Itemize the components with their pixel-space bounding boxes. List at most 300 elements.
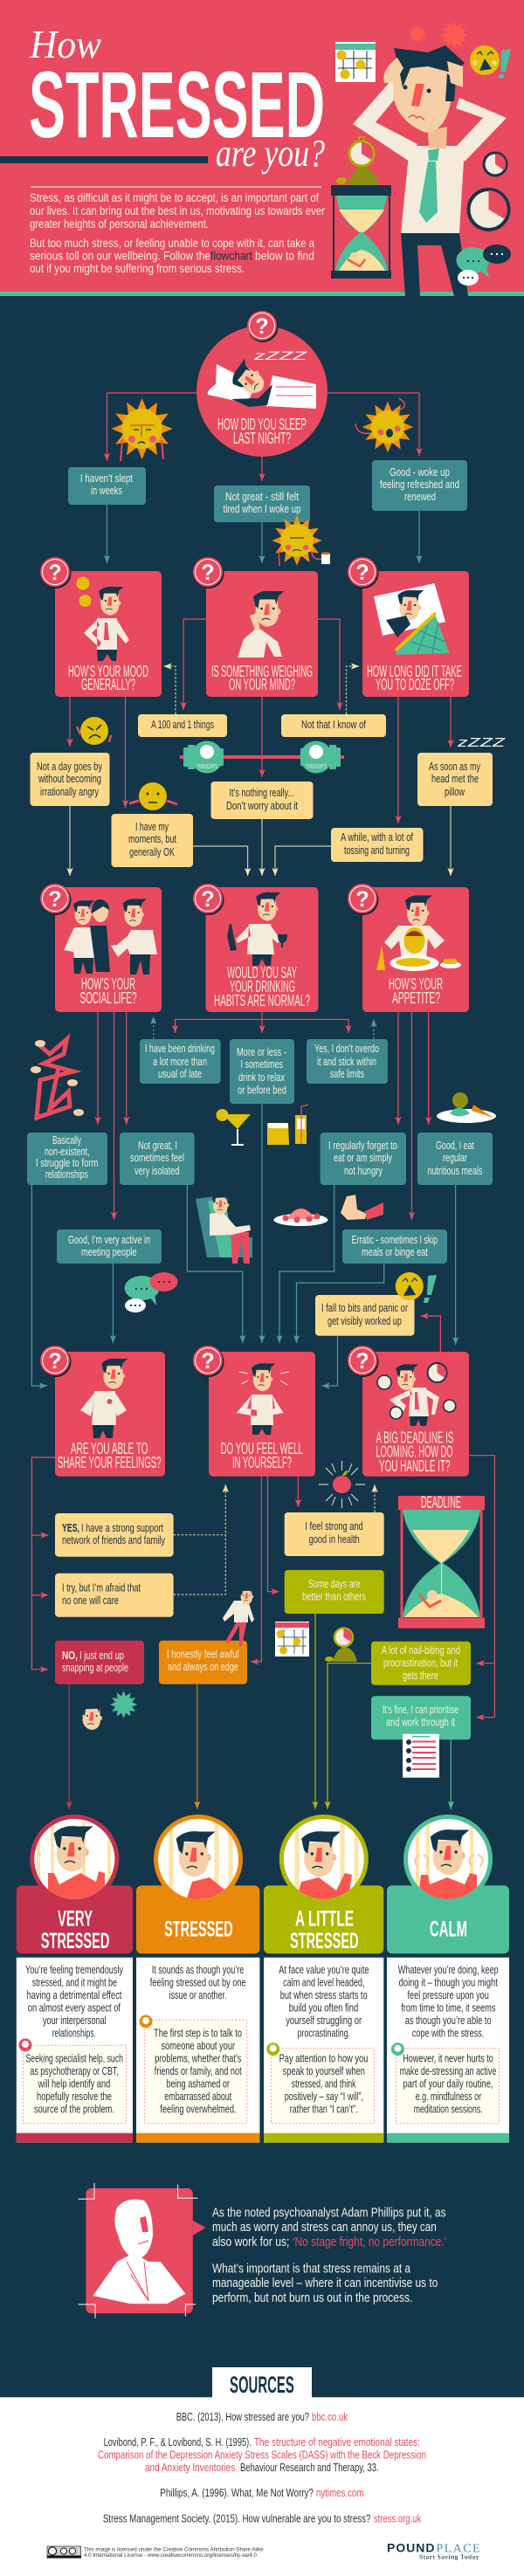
question badge: ? (48, 887, 62, 912)
result card: very stressed (17, 1815, 133, 2143)
answer: fall to bits: get visibly worked up (328, 1314, 402, 1327)
answer: 100 and 1 things: A 100 and 1 things (151, 718, 214, 731)
icon: man in armchair (196, 1192, 252, 1264)
description (150, 1963, 246, 2001)
icon: checklist (403, 1734, 439, 1778)
answer: not a day (30, 753, 110, 806)
panel: share feelings (55, 1352, 165, 1477)
portrait (403, 1815, 493, 1904)
source list: Lovibond, P. F., & Lovibond, S. H. (1995). (104, 2436, 252, 2449)
quote text (212, 2206, 446, 2305)
panel: deadline (362, 1352, 469, 1477)
result card: stressed (136, 1815, 259, 2143)
description: cope with the stress. (412, 2026, 484, 2039)
heading (217, 416, 307, 447)
answer: not that I know of (281, 714, 386, 737)
heading: HOW DID YOU SLEEP (217, 416, 307, 433)
heading: LAST NIGHT? (233, 430, 291, 447)
heading: SOURCES (230, 2372, 294, 2398)
answer: more or less: More or less - (237, 1045, 286, 1058)
answer: very isolated: sometimes feel (130, 1151, 184, 1164)
answer: drinking more: I have been drinking (145, 1042, 215, 1055)
figure: proud man (237, 1363, 289, 1435)
heading (290, 1907, 359, 1953)
question badge: ? (48, 1349, 62, 1374)
heading (68, 663, 148, 693)
result card: calm (387, 1815, 509, 2143)
tip box (140, 2015, 247, 2124)
tip box: stressed, and think (292, 2077, 356, 2090)
tip box: rather than “I can’t”. (290, 2102, 358, 2115)
intro text: serious toll on our wellbeing. Follow the (30, 250, 210, 262)
icon: happy sun (355, 398, 413, 452)
title (0, 22, 325, 175)
tip box: friends or family, and not (155, 2064, 242, 2077)
answer: forget to eat (321, 1133, 406, 1185)
tip box: meditation sessions. (414, 2102, 483, 2115)
icon: panic emoji (396, 1272, 437, 1303)
description: but when stress starts to (280, 1988, 368, 2001)
answer: fine: and work through it (386, 1716, 455, 1729)
intro text: our lives. It can bring out the best in us, motivating us towards ever (30, 204, 325, 217)
icon: tangled arms (31, 1039, 84, 1118)
answer: my moments: I have my (135, 820, 169, 833)
source list: Behaviour Research and Therapy, 33. (240, 2462, 379, 2474)
question badge: ? (201, 561, 215, 585)
icon: thoughts dumbbell: THOUGHTS (196, 764, 217, 770)
description (25, 1963, 123, 2039)
answer: no: snapping at people (62, 1661, 128, 1674)
intro text: out if you might be suffering from serious stress. (30, 262, 245, 275)
icon: speech bubbles (456, 245, 511, 286)
answer: safe limits: safe limits (330, 1067, 364, 1080)
answer: no (55, 1641, 144, 1684)
result card: a little stressed (264, 1815, 383, 2143)
answer: my moments: generally OK (129, 845, 175, 858)
answer: nail-biting (371, 1642, 471, 1685)
answer: fall to bits: I fall to bits and panic or (321, 1301, 408, 1314)
icon: apple (319, 1461, 365, 1508)
quote text: much as worry and stress can annoy us, they can (212, 2221, 437, 2235)
heading: SOCIAL LIFE? (80, 989, 136, 1007)
connectors: row two (31, 1012, 456, 1386)
answer: yes support: YES, (62, 1521, 79, 1534)
answer: as soon as: As soon as my (429, 760, 480, 773)
answer: drinking more: usual of late (158, 1067, 202, 1080)
answer: fine (371, 1696, 471, 1739)
question badge (193, 557, 224, 589)
answer: not a day: irrationally angry (40, 785, 99, 798)
answer: haven't slept (68, 467, 146, 505)
source list: Comparison of the Depression Anxiety Stress Scales (DASS) with the Beck Depression (98, 2449, 426, 2462)
illustration: stressed man (353, 45, 507, 296)
logo: PoundPlace (387, 2541, 480, 2561)
answer: forget to eat: eat or am simply (334, 1151, 392, 1164)
description (279, 1963, 369, 2039)
description: stressed, and it might be (32, 1975, 117, 1988)
portrait (30, 1815, 119, 1904)
title: are you? (216, 132, 325, 175)
description: You’re feeling tremendously (25, 1963, 123, 1976)
heading: HABITS ARE NORMAL? (214, 992, 310, 1009)
answer: awful: I honestly feel awful (167, 1648, 239, 1661)
answer: fall to bits (315, 1295, 414, 1336)
source list: BBC. (2013). How stressed are you? (176, 2411, 309, 2423)
tip box: someone about your (161, 2039, 236, 2052)
answer: erratic: meals or binge eat (362, 1245, 428, 1258)
answer: yes support (55, 1513, 174, 1557)
answer: not great (214, 486, 310, 522)
answer: good (372, 460, 467, 511)
intro text: But too much stress, or feeling unable to cope with it, can take a (30, 237, 314, 250)
header band (0, 0, 524, 296)
answer: a while (331, 828, 423, 862)
question badge: ? (201, 1349, 215, 1374)
icon: burst stars (409, 21, 468, 49)
quote text: What’s important is that stress remains at a (212, 2262, 411, 2276)
title: STRESSED (29, 52, 325, 157)
tip box: speak to yourself when (283, 2064, 365, 2077)
intro text: Stress, as difficult as it might be to accept, is an important part of (30, 191, 319, 204)
tip box (266, 2042, 375, 2124)
description: relationships. (52, 2026, 96, 2039)
heading: YOUR DRINKING (230, 978, 295, 995)
answer: good meals: regular (443, 1151, 467, 1164)
source list: Phillips, A. (1996). What, Me Not Worry? (160, 2487, 314, 2499)
answer: strong (285, 1512, 384, 1556)
intro text: below to find (255, 250, 314, 262)
intro text (30, 186, 325, 275)
heading (41, 1907, 110, 1953)
connectors: row one (70, 619, 451, 876)
licence badge (47, 2546, 81, 2559)
licence text: This image is licensed under the Creative Commons Attribution-Share Alike (84, 2547, 264, 2553)
question badge (348, 884, 379, 915)
answer: my moments (112, 814, 193, 867)
answer: a while: A while, with a lot of (341, 830, 413, 844)
source list: nytimes.com (316, 2487, 363, 2499)
answer: active socially: Good, I’m very active in (68, 1233, 150, 1246)
answer: forget to eat: not hungry (344, 1164, 383, 1177)
description: as though you’re able to (405, 2014, 492, 2027)
panel: Adam Phillips portrait (79, 2183, 205, 2318)
tip box: positively – say “I will”, (285, 2090, 363, 2103)
answer: some days: better than others (302, 1590, 366, 1603)
answer: basically non-existent: I struggle to form (36, 1156, 98, 1169)
tip box: embarrassed about (164, 2090, 231, 2103)
answer: awful: and always on edge (168, 1660, 238, 1673)
figure: group of people (64, 899, 157, 975)
question badge (40, 557, 72, 589)
licence text: 4.0 International License - www.creativecommons.org/licenses/by-sa/4.0 (84, 2552, 257, 2559)
icon: deadline hourglass (398, 1494, 485, 1629)
answer: safe limits (307, 1039, 388, 1084)
panel: drinking (206, 887, 318, 1012)
heading: STRESSED (164, 1918, 233, 1942)
portrait (154, 1815, 243, 1904)
tip box: Pay attention to how you (279, 2051, 368, 2064)
title: How (29, 22, 101, 66)
licence text (84, 2547, 264, 2559)
icon: thoughts dumbbell (180, 740, 344, 774)
answer: good: feeling refreshed and (380, 478, 459, 491)
question badge: ? (355, 887, 369, 912)
answer: haven't slept: in weeks (91, 484, 122, 497)
icon: sleepy sun with mug (272, 515, 330, 566)
description: your interpersonal (43, 2014, 107, 2027)
icon: angry emoji (77, 717, 111, 745)
answer: not great: tired when I woke up (224, 502, 300, 515)
heading: APPETITE? (392, 989, 440, 1007)
question badge: ? (255, 314, 269, 339)
answer: not great: Not great - still felt (225, 490, 299, 503)
answer: very isolated (120, 1133, 195, 1185)
icon: hourglass (331, 185, 391, 279)
figure: worried man (238, 591, 284, 658)
answer: drinking more (140, 1039, 221, 1084)
source list: stress.org.uk (374, 2512, 422, 2524)
quote text: perform, but not burn us out in the process. (212, 2291, 412, 2305)
tip box: being ashamed or (167, 2077, 230, 2090)
heading: STRESSED (290, 1929, 359, 1953)
connectors: row three (31, 1456, 494, 1809)
heading: YOU HANDLE IT? (379, 1457, 451, 1475)
description (398, 1963, 499, 2039)
answer: drinking more: a lot more than (153, 1055, 207, 1068)
heading: LOOMING. HOW DO (376, 1443, 452, 1461)
quote text: As the noted psychoanalyst Adam Phillips put it, as (212, 2206, 445, 2220)
description: build you often find (289, 2001, 358, 2014)
answer: haven't slept: I haven’t slept (80, 472, 133, 485)
answer: basically non-existent: relationships (45, 1167, 88, 1181)
figure: man eating (376, 895, 461, 971)
answer: not a day: without becoming (38, 772, 101, 785)
icon: turtle with stopwatch (325, 1628, 357, 1662)
answer: 100 and 1 things (138, 714, 227, 737)
heading: A BIG DEADLINE IS (376, 1429, 453, 1447)
question badge (193, 1346, 224, 1377)
description: feeling stressed out by one (150, 1975, 246, 1988)
panel: doze off (362, 571, 469, 697)
icon: man in bed: zZZZ (252, 348, 307, 362)
source list: and Anxiety Inventories. (145, 2462, 238, 2474)
answer: as soon as: pillow (445, 785, 465, 798)
answer: good: renewed (404, 490, 436, 503)
answer: nothing really: It’s nothing really... (229, 786, 294, 799)
heading (80, 975, 136, 1007)
answer: nail-biting: gets there (403, 1669, 438, 1682)
description: It sounds as though you’re (152, 1963, 244, 1976)
answer: I try (55, 1574, 174, 1617)
heading: VERY (58, 1907, 93, 1932)
tip box (391, 2042, 500, 2124)
answer: strong: I feel strong and (305, 1519, 363, 1533)
answer: safe limits: it and stick within (317, 1055, 376, 1068)
icon: stopwatch on turtle (336, 137, 379, 185)
panel: social life (55, 887, 162, 1012)
answer: yes support: I have a strong support (81, 1521, 163, 1534)
quote text: also work for us; (212, 2235, 289, 2249)
answer: more or less: or before bed (238, 1084, 286, 1097)
panel: appetite (362, 887, 469, 1012)
icon: walking man (223, 1587, 255, 1646)
source list: bbc.co.uk (312, 2411, 348, 2423)
icon: sleep letters: zZZZ (456, 735, 506, 750)
description: yourself struggling or (286, 2014, 362, 2027)
answer: awful (159, 1641, 247, 1684)
figure: man on pillow (374, 583, 450, 655)
answer: I try: no one will care (62, 1594, 119, 1607)
heading: HOW’S YOUR (389, 975, 443, 993)
icon: waving hand (341, 1195, 383, 1220)
heading: WOULD YOU SAY (227, 964, 297, 981)
portrait (279, 1815, 369, 1904)
heading: GENERALLY? (81, 676, 135, 693)
answer: good: Good - woke up (390, 465, 450, 479)
question badge (40, 884, 72, 915)
answer: yes support: network of friends and family (62, 1533, 165, 1546)
description: feel pressure upon you (407, 1988, 489, 2001)
heading: YOU TO DOZE OFF? (376, 676, 454, 693)
heading: IS SOMETHING WEIGHING (211, 663, 313, 680)
logo: PoundPlace: Start Saving Today (419, 2553, 479, 2561)
answer: very isolated: Not great, I (138, 1139, 177, 1152)
description: on almost every aspect of (28, 2001, 121, 2014)
icon: calendar (335, 42, 376, 82)
answer: good meals: Good, I eat (436, 1139, 474, 1152)
icon: chat bubbles (125, 1272, 178, 1312)
panel: feel well (209, 1352, 315, 1477)
heading: HOW’S YOUR MOOD (68, 663, 148, 680)
answer: more or less: I sometimes (241, 1057, 283, 1071)
question badge: ? (355, 561, 369, 585)
sources section (0, 2367, 524, 2576)
answer: very isolated: very isolated (134, 1164, 180, 1177)
figure: man with two moods (77, 576, 129, 661)
answer: a while: tossing and turning (344, 844, 410, 857)
heading: SHARE YOUR FEELINGS? (58, 1454, 161, 1471)
answer: some days: Some days are (308, 1577, 360, 1590)
logo: PoundPlace: POUND (387, 2541, 435, 2555)
description: At face value you’re quite (279, 1963, 369, 1976)
answer: nothing really (211, 782, 313, 819)
question badge (193, 884, 224, 915)
figure: man with watches (377, 1363, 456, 1426)
answer: as soon as (417, 753, 493, 806)
heading (376, 1429, 453, 1475)
connectors: sleep question (107, 393, 419, 563)
intro text: flowchart (210, 250, 252, 262)
question badge (40, 1346, 72, 1377)
answer: erratic: Erratic - sometimes I skip (352, 1233, 438, 1246)
answer: safe limits: Yes, I don’t overdo (314, 1042, 379, 1055)
answer: I try: I try, but I’m afraid that (62, 1581, 141, 1595)
tip box: feeling overwhelmed. (160, 2102, 237, 2115)
heading: STRESSED (41, 1929, 110, 1953)
heading: ARE YOU ABLE TO (71, 1440, 148, 1457)
description: having a detrimental effect (27, 1988, 122, 2001)
icon: small calendar (275, 1622, 309, 1656)
answer: nothing really: Don’t worry about it (226, 799, 298, 812)
tip box: source of the problem. (34, 2102, 114, 2115)
heading (389, 975, 443, 1007)
heading: A LITTLE (295, 1907, 354, 1932)
answer: good meals: nutritious meals (428, 1164, 483, 1177)
source list (98, 2411, 426, 2524)
logo: PoundPlace: PLACE (436, 2543, 480, 2556)
answer: no: I just end up (79, 1649, 124, 1662)
answer: basically non-existent: Basically (52, 1133, 81, 1147)
tip box: e.g. mindfulness or (416, 2090, 482, 2103)
answer: strong: good in health (309, 1533, 360, 1546)
answer: not that I know of: Not that I know of (301, 718, 366, 731)
heading: CALM (430, 1918, 467, 1942)
icon: spaghetti plate (273, 1209, 328, 1226)
quote text: manageable level – where it can incentivise us to (212, 2276, 438, 2290)
tip box: will help identify and (38, 2077, 110, 2090)
answer: active socially (57, 1229, 162, 1264)
icon: deadline hourglass: DEADLINE (421, 1494, 461, 1512)
answer: good meals (417, 1133, 493, 1185)
question badge (348, 557, 379, 589)
heading (214, 964, 310, 1009)
icon: neutral emoji (129, 782, 177, 810)
panel: sleep question (196, 326, 328, 457)
tip box (19, 2038, 126, 2124)
tip box: hopefully resolve the (37, 2090, 112, 2103)
icon: panic emoji (470, 45, 511, 79)
question badge: ? (201, 887, 215, 912)
icon: healthy plate (437, 1092, 496, 1123)
tip box: as psychotherapy or CBT, (30, 2064, 119, 2077)
answer: active socially: meeting people (81, 1245, 136, 1258)
figure: man with wine (227, 892, 287, 966)
heading (58, 1440, 161, 1471)
heading: ON YOUR MIND? (229, 676, 295, 693)
tip box: Seeking specialist help, such (26, 2051, 123, 2064)
answer: as soon as: head met the (431, 772, 479, 785)
description: procrastinating. (298, 2026, 350, 2039)
tip box: problems, whether that’s (155, 2051, 242, 2064)
answer: nail-biting: A lot of nail-biting and (382, 1643, 460, 1656)
description: issue or another. (169, 1988, 227, 2001)
source list: The structure of negative emotional states: (254, 2436, 420, 2449)
question badge (348, 1346, 379, 1377)
intro text: greater heights of personal achievement. (30, 217, 209, 231)
answer: some days (285, 1570, 384, 1614)
question badge (247, 311, 278, 342)
icon: cocktail (217, 1109, 251, 1146)
answer: my moments: moments, but (128, 832, 176, 845)
heading (221, 1440, 303, 1471)
heading: DO YOU FEEL WELL (221, 1440, 303, 1457)
quote text: ‘No stage fright, no performance.’ (293, 2235, 446, 2249)
answer: forget to eat: I regularly forget to (328, 1139, 397, 1152)
panel: weighing on mind (206, 571, 318, 697)
source list: Stress Management Society. (2015). How vulnerable are you to stress? (103, 2512, 370, 2524)
heading: HOW’S YOUR (81, 975, 135, 993)
answer: basically non-existent (27, 1133, 107, 1185)
icon: angry man (81, 1691, 137, 1730)
description: calm and level headed, (283, 1975, 365, 1988)
answer: no: NO, (62, 1649, 78, 1662)
answer: nail-biting: procrastination, but it (383, 1656, 458, 1670)
icon: thoughts dumbbell: THOUGHTS (306, 764, 327, 770)
icon: clocks (468, 153, 508, 230)
tip box: The first step is to talk to (154, 2026, 242, 2039)
answer: more or less: drink to relax (238, 1071, 285, 1084)
icon: tired sun (112, 398, 173, 461)
